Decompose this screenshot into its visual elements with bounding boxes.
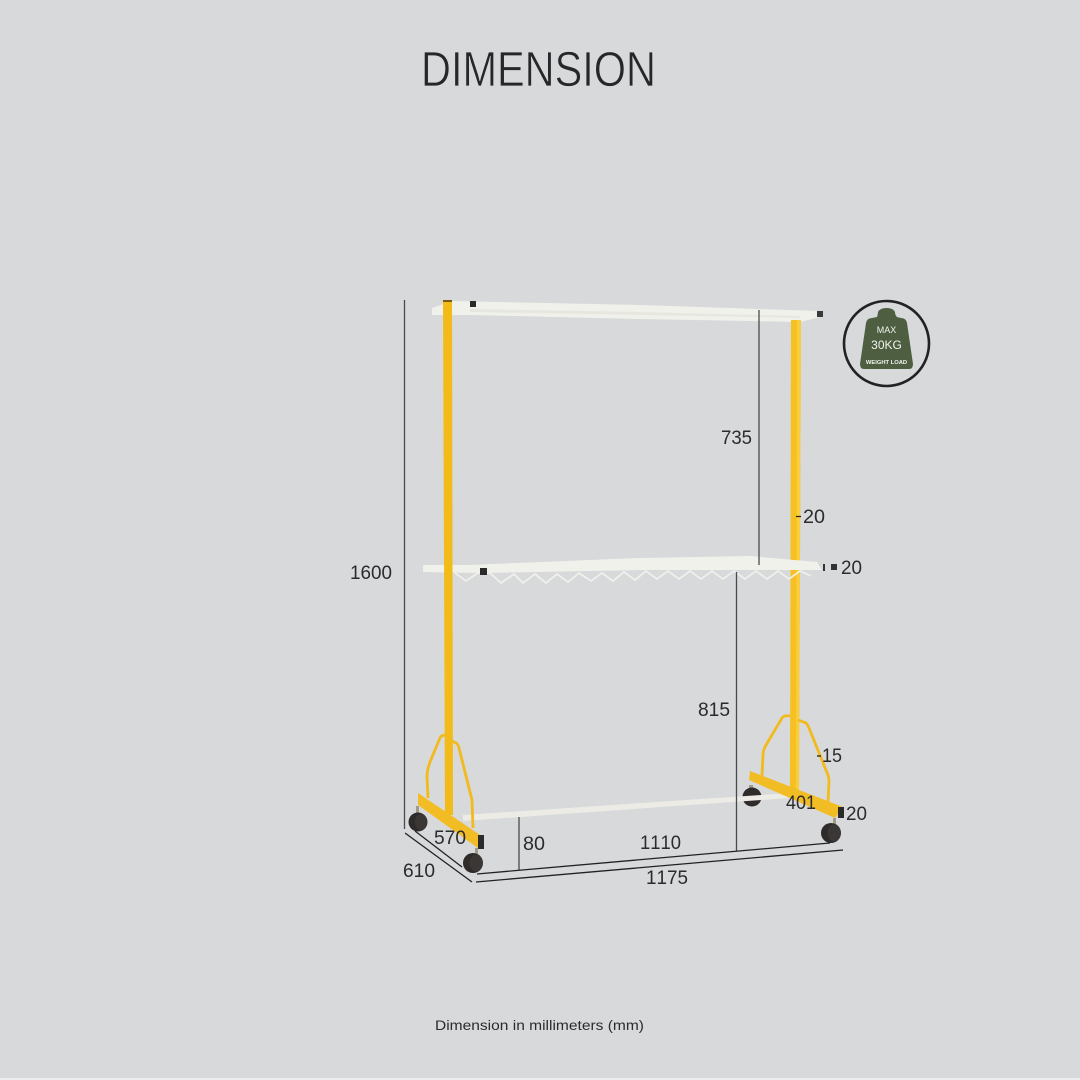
label 570: 570 xyxy=(434,828,466,849)
label 735: 735 xyxy=(721,428,752,449)
title: DIMENSION xyxy=(421,43,656,97)
label 1175: 1175 xyxy=(646,868,688,889)
text: 30KG: 30KG xyxy=(871,338,902,352)
clothes rack product illustration xyxy=(408,300,844,873)
left foot xyxy=(418,793,484,854)
max weight badge xyxy=(844,301,929,386)
left upright xyxy=(443,300,453,815)
label 815: 815 xyxy=(698,700,730,721)
label 20 upright: 20 xyxy=(803,507,825,528)
label 15: 15 xyxy=(822,746,842,767)
right brace xyxy=(762,716,829,802)
dimension labels xyxy=(350,428,867,889)
label 20 foot: 20 xyxy=(846,804,867,825)
icon: weight xyxy=(860,308,913,369)
dimension lines xyxy=(404,300,843,882)
text: WEIGHT LOAD: WEIGHT LOAD xyxy=(866,360,907,366)
label 20 shelf: 20 xyxy=(841,558,862,579)
right upright xyxy=(790,320,801,793)
front wheels xyxy=(463,823,841,873)
lower rail xyxy=(463,793,790,821)
footnote: Dimension in millimeters (mm) xyxy=(435,1018,644,1033)
label 1110: 1110 xyxy=(640,833,681,854)
label 610: 610 xyxy=(403,861,435,882)
top shelf xyxy=(432,301,823,322)
text: MAX: MAX xyxy=(877,325,896,335)
label 80: 80 xyxy=(523,834,545,855)
label 401: 401 xyxy=(786,793,816,814)
middle shelf xyxy=(423,556,837,583)
badge ring xyxy=(844,301,929,386)
left brace xyxy=(427,735,473,828)
right foot xyxy=(749,771,844,824)
label 1600: 1600 xyxy=(350,563,392,584)
back wheels xyxy=(408,785,762,832)
